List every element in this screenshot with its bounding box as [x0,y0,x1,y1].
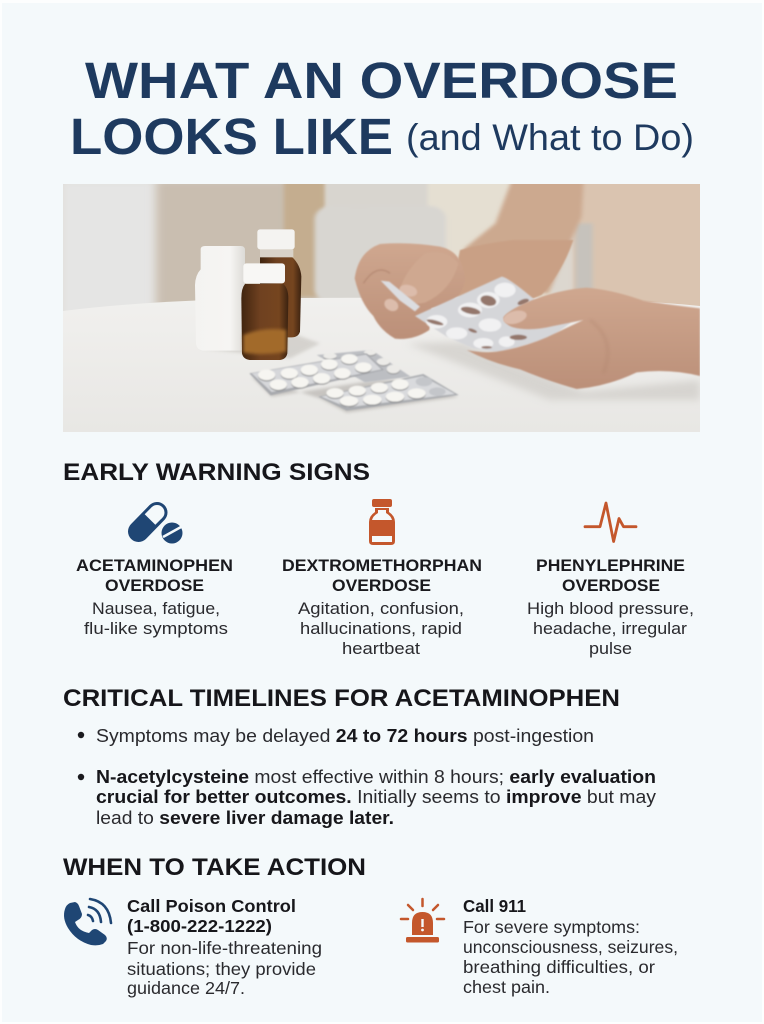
text block: timeline bullets: lead to severe liver damage later. [96,808,394,828]
heading: when to take action: WHEN TO TAKE ACTION [63,854,366,881]
panel: phenylephrine overdose: headache, irregular [533,619,687,638]
panel: call poison control: Call Poison Control [127,896,296,916]
panel: call 911: Call 911 [463,896,526,916]
panel: dextromethorphan overdose: OVERDOSE [332,576,431,595]
blister pack held in hands [381,277,571,353]
title: LOOKS LIKE [70,108,393,165]
title: WHAT AN OVERDOSE [85,52,678,109]
text block: timeline bullets: Symptoms may be delayed 24 to 72 hours post-ingestion [96,726,594,746]
icon: emergency beacon [401,899,444,942]
icon: medicine bottle [369,499,395,545]
back amber bottle [257,229,301,337]
panel: acetaminophen overdose [76,505,233,638]
panel: acetaminophen overdose: Nausea, fatigue, [92,599,220,618]
heading: critical timelines: CRITICAL TIMELINES FOR ACETAMINOPHEN [63,685,620,712]
heading: early warning signs: EARLY WARNING SIGNS [63,459,370,486]
panel: dextromethorphan overdose: hallucinations, rapid [300,619,462,638]
photo: hands holding blister packs beside medicine bottles [60,180,705,432]
hands [355,240,700,400]
panel: dextromethorphan overdose [282,499,482,658]
front amber bottle [241,263,288,360]
bottle shadows [218,335,318,359]
text block: timeline bullets [78,726,656,828]
panel: phenylephrine overdose: High blood pressure, [527,599,694,618]
blister pack left [249,353,384,395]
panel: call poison control: situations; they provide [127,959,316,979]
title [70,52,694,165]
icon: phone with signal waves [64,899,111,945]
panel: acetaminophen overdose: ACETAMINOPHEN [76,556,233,575]
text block: timeline bullets: N-acetylcysteine most effective within 8 hours; early evaluation [96,767,656,787]
panel: call 911: breathing difficulties, or [463,957,655,977]
blister pack right [318,374,459,411]
panel: call poison control: guidance 24/7. [127,978,245,998]
panel: acetaminophen overdose: OVERDOSE [105,576,204,595]
icon: heartbeat pulse [585,503,636,542]
panel: call poison control: (1-800-222-1222) [127,916,272,936]
panel: phenylephrine overdose: PHENYLEPHRINE [536,556,685,575]
panel: call 911: unconsciousness, seizures, [463,937,678,957]
panel: call poison control [64,896,322,998]
panel: dextromethorphan overdose: DEXTROMETHORPHAN [282,556,482,575]
panel: dextromethorphan overdose: Agitation, confusion, [298,599,464,618]
panel: call 911: chest pain. [463,977,550,997]
white bottle [195,246,245,351]
panel: call 911 [401,896,678,997]
panel: acetaminophen overdose: flu-like symptoms [84,619,228,638]
panel: call poison control: For non-life-threatening [127,938,322,958]
panel: dextromethorphan overdose: heartbeat [342,639,420,658]
panel: phenylephrine overdose: OVERDOSE [562,576,660,595]
panel: call 911: For severe symptoms: [463,917,640,937]
pack shadows [252,377,458,413]
text block: timeline bullets: crucial for better outcomes. Initially seems to improve but may [96,787,656,807]
panel: phenylephrine overdose [527,503,694,658]
icon: capsule and tablet [138,505,182,544]
table top [63,297,700,432]
panel: phenylephrine overdose: pulse [589,639,632,658]
blister pack back [317,350,411,382]
title: (and What to Do) [406,117,694,158]
